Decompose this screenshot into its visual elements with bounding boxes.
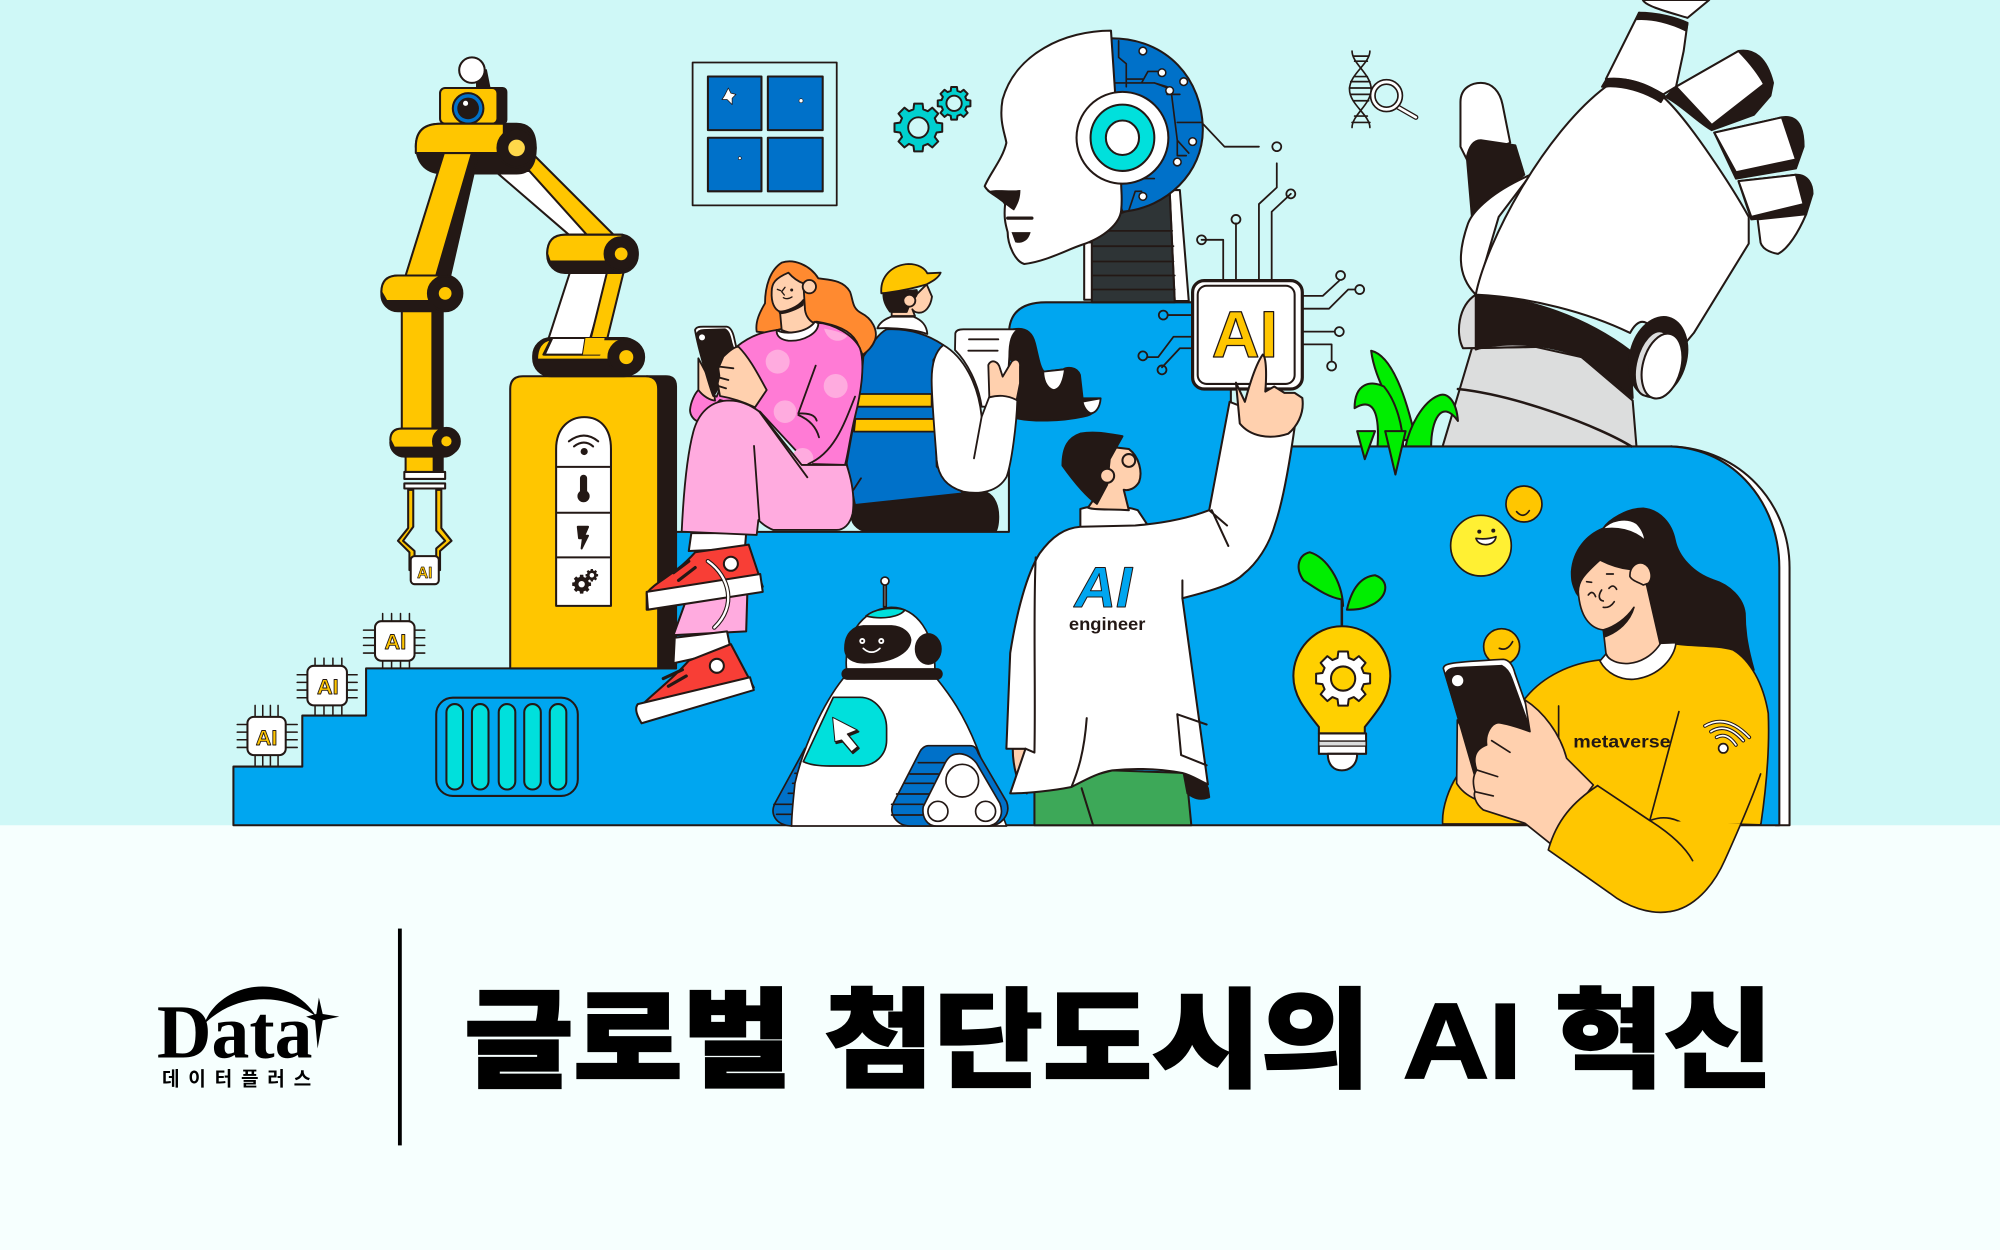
lower legs and red sneakers [636,533,763,723]
circuit lines around AI chip [1138,124,1364,374]
smiley faces [1451,486,1542,665]
icon: teal gears [894,87,970,151]
AI chip button: AI [1212,298,1278,372]
green plant [1355,351,1458,474]
man in vest reading scroll [847,264,1101,532]
robot hand [1443,0,1812,446]
icon: DNA with magnifier [1349,51,1416,128]
woman with smartphone in metaverse sweater [1443,486,1769,912]
robot arm with camera [381,57,644,584]
divider line [398,929,402,1145]
AI engineer in white coat: engineer [1069,614,1145,634]
AI engineer in white coat: AI [1073,556,1133,620]
blue stepped platform [233,302,1790,825]
woman with smartphone in metaverse sweater: metaverse [1573,731,1671,751]
AI chips on stairs [237,614,425,765]
title: 글로벌 첨단도시의 AI 혁신 [464,981,1773,1101]
AI chips on stairs: AI [385,629,406,654]
lightbulb with sprout [1293,552,1390,770]
small wheeled robot [773,577,1008,826]
logo: Data Plus: Data [157,989,312,1074]
AI engineer in white coat [1006,355,1303,825]
yellow control pillar [510,376,676,668]
robot head with circuit brain [985,31,1203,302]
woman with phone [682,261,876,535]
man in vest and woman with phone sitting back to back [682,261,1101,535]
AI chip button [1193,281,1302,389]
AI chips on stairs: AI [256,725,277,750]
logo: Data Plus: 데이터플러스 [162,1068,311,1090]
AI chips on stairs: AI [317,674,339,699]
window with night sky [693,62,837,205]
vent with teal bars [436,698,578,796]
robot arm with camera: AI [417,565,432,582]
